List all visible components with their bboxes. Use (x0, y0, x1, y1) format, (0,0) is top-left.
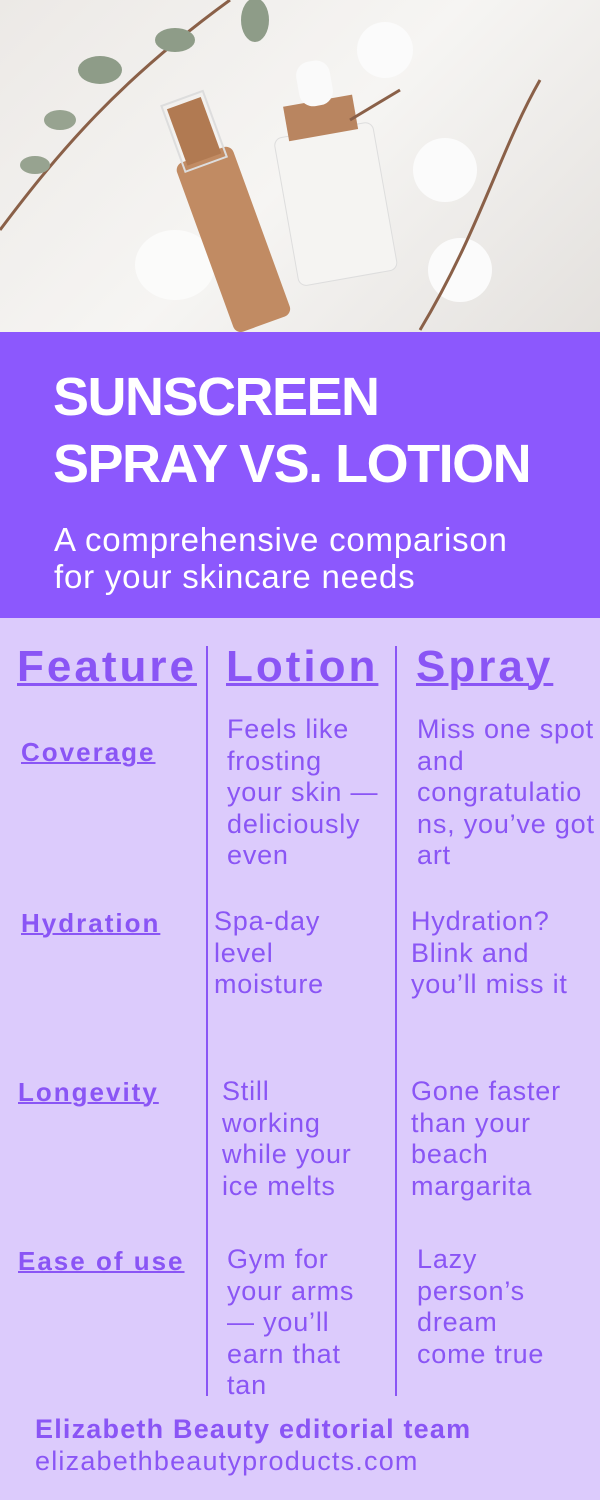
row: hydration: Hydration (21, 908, 160, 938)
icon: eucalyptus branch (0, 0, 269, 230)
table headers: Feature (17, 642, 197, 691)
row: coverage: deliciously (227, 808, 360, 838)
row: longevity: working (222, 1108, 321, 1138)
subtitle: A comprehensive comparison (54, 521, 508, 558)
row: coverage: frosting (227, 746, 322, 776)
row: ease of use: — you’ll (227, 1307, 329, 1337)
footer credits: Elizabeth Beauty editorial team (35, 1414, 471, 1444)
row: coverage: even (227, 840, 289, 870)
row: ease of use: earn that (227, 1338, 341, 1368)
icon: gold spray bottle (154, 88, 292, 334)
title: SPRAY VS. LOTION (53, 434, 530, 494)
row: hydration (21, 906, 568, 999)
subtitle: for your skincare needs (54, 558, 415, 595)
title: SUNSCREEN (53, 367, 379, 427)
icon: white dropper bottle (261, 53, 398, 287)
row: hydration: you’ll miss it (411, 969, 568, 999)
row: ease of use: Lazy (417, 1244, 477, 1274)
row: coverage: Feels like (227, 714, 349, 744)
row: ease of use: tan (227, 1370, 267, 1400)
row: ease of use: come true (417, 1338, 544, 1368)
hero photo (0, 0, 600, 332)
row: coverage: Miss one spot (417, 714, 594, 744)
title (53, 367, 530, 494)
header band (0, 332, 600, 618)
row: ease of use (18, 1244, 544, 1400)
row: ease of use: your arms (227, 1276, 354, 1306)
row: coverage: Coverage (21, 737, 156, 767)
footer credits (35, 1414, 471, 1476)
row: longevity: while your (222, 1139, 352, 1169)
row: coverage: your skin — (227, 777, 378, 807)
row: coverage: congratulatio (417, 777, 582, 807)
row: hydration: Hydration? (411, 906, 550, 936)
row: hydration: Blink and (411, 938, 529, 968)
row: ease of use: Ease of use (18, 1246, 185, 1276)
footer credits: elizabethbeautyproducts.com (35, 1446, 419, 1476)
column dividers (206, 646, 208, 1396)
row: longevity: Longevity (18, 1077, 159, 1107)
row: coverage: and (417, 746, 464, 776)
icon: cream swatch (135, 230, 215, 300)
row: longevity: than your (411, 1108, 531, 1138)
row: hydration: Spa-day (214, 906, 320, 936)
row: ease of use: dream (417, 1307, 498, 1337)
text: Spray (416, 642, 553, 691)
row: hydration: level (214, 938, 274, 968)
row: ease of use: Gym for (227, 1244, 329, 1274)
row: coverage (21, 714, 595, 870)
row: longevity: Still (222, 1076, 270, 1106)
text: Lotion (226, 642, 378, 691)
row: coverage: ns, you’ve got (417, 808, 595, 838)
row: hydration: moisture (214, 969, 324, 999)
row: longevity (18, 1076, 561, 1200)
row: longevity: margarita (411, 1170, 532, 1200)
subtitle (54, 521, 508, 595)
icon: cotton flowers (357, 22, 492, 302)
row: longevity: ice melts (222, 1170, 336, 1200)
row: coverage: art (417, 840, 451, 870)
row: longevity: beach (411, 1139, 489, 1169)
row: ease of use: person’s (417, 1276, 525, 1306)
row: longevity: Gone faster (411, 1076, 561, 1106)
